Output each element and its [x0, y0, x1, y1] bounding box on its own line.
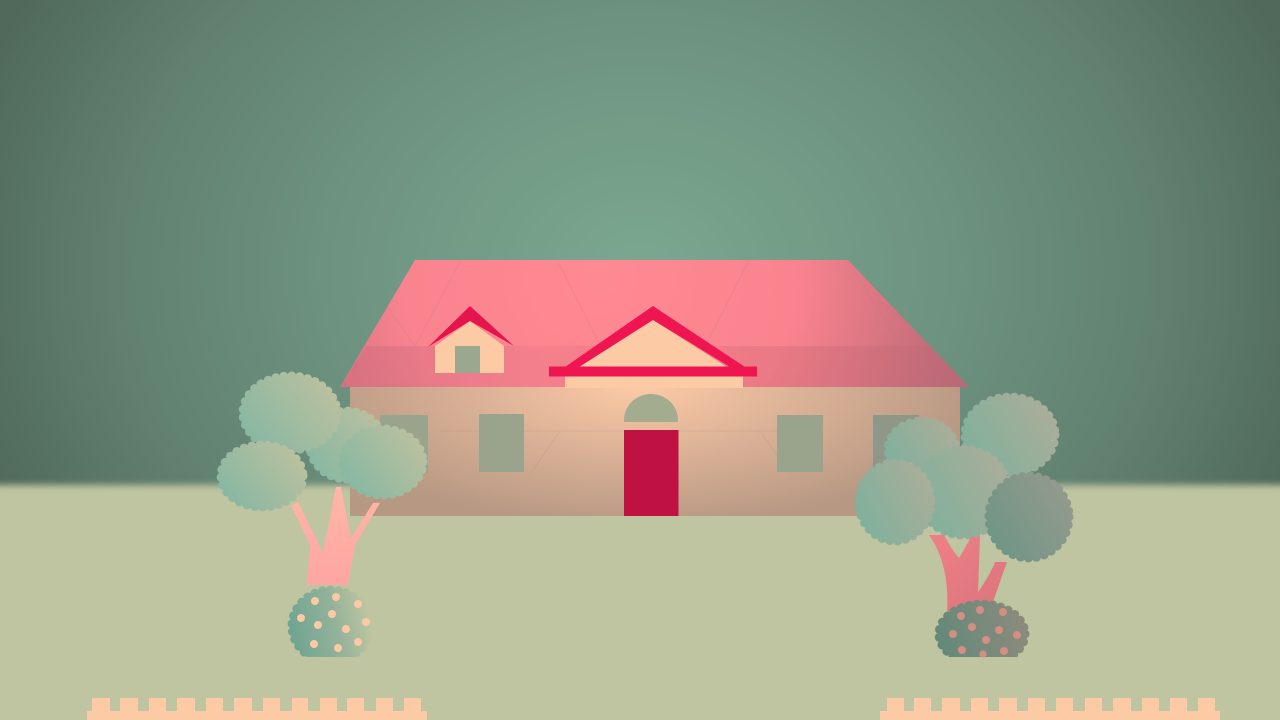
left canopy [221, 376, 423, 507]
gable beam [549, 366, 757, 376]
left tree [221, 376, 423, 662]
right canopy [859, 397, 1069, 558]
main gable [549, 306, 757, 376]
gable roof [565, 306, 745, 367]
house wall [350, 387, 960, 516]
right fence [880, 698, 1220, 720]
dormer roof [428, 306, 514, 347]
left bush berries [297, 593, 370, 652]
dormer body [435, 321, 504, 373]
roof facet lines [388, 262, 902, 474]
window far right [873, 415, 919, 472]
entrance bay [565, 376, 743, 388]
gable fill [579, 320, 727, 367]
left bush [292, 590, 370, 662]
window left [479, 414, 524, 472]
roof [340, 260, 969, 387]
roof lower band [340, 346, 969, 387]
left trunk [291, 487, 380, 585]
left fence [87, 698, 427, 720]
door arch window [624, 394, 678, 422]
dormer [428, 306, 514, 373]
window far left [380, 415, 428, 473]
background sky [0, 0, 1280, 500]
right trunk [929, 535, 1007, 612]
window right [777, 415, 823, 472]
door [624, 430, 678, 516]
ground [0, 485, 1280, 720]
right bush berries [949, 606, 1021, 658]
right bush [939, 604, 1025, 664]
house [340, 260, 969, 516]
right tree [859, 397, 1069, 664]
dormer window [455, 346, 480, 373]
